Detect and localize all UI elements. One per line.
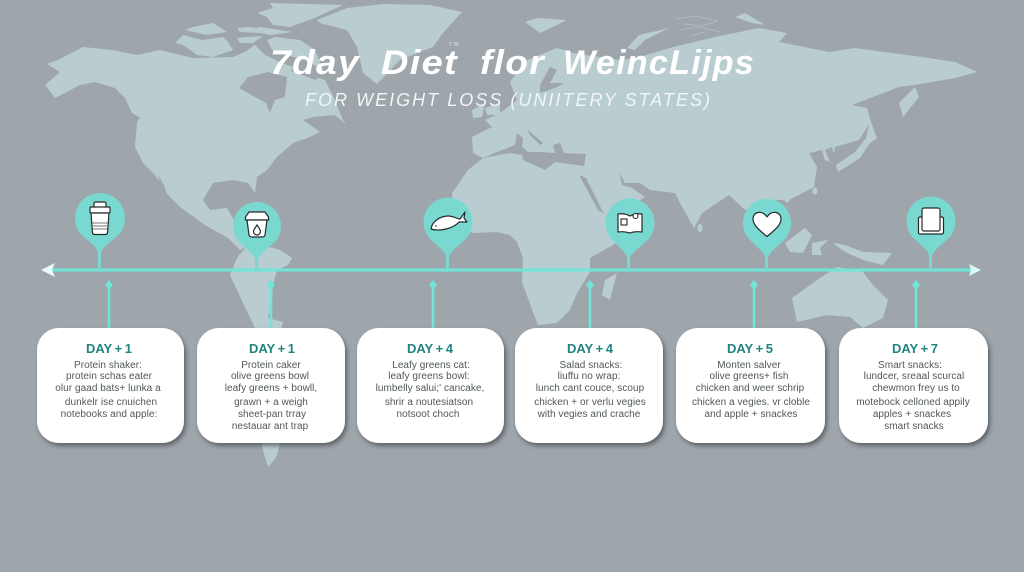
title: TM bbox=[449, 42, 460, 48]
card: day 4 second: Salad snacks: bbox=[560, 360, 622, 371]
card: day 1 second: olive greens bowl bbox=[231, 371, 309, 382]
pin: cup icon bbox=[233, 202, 281, 270]
world map bbox=[45, 3, 977, 467]
pin: fish icon bbox=[424, 198, 472, 270]
title bbox=[270, 42, 755, 82]
card: day 7: Smart snacks: bbox=[878, 360, 942, 371]
card: day 5: chicken a vegies. vr cloble bbox=[692, 397, 810, 408]
card: day 1 second: leafy greens + bowll, bbox=[225, 383, 317, 394]
card: day 5: and apple + snackes bbox=[705, 409, 797, 420]
card: day 4 second: chicken + or verlu vegies bbox=[534, 397, 646, 408]
card: day 7: motebock celloned appily bbox=[856, 397, 970, 408]
timeline arrow bbox=[41, 263, 981, 277]
card: day 5 bbox=[676, 328, 825, 443]
pin: heart icon bbox=[743, 199, 791, 270]
title: WeincLijps bbox=[563, 44, 755, 82]
card: day 7: DAY + 7 bbox=[892, 341, 938, 356]
card: day 1: Protein shaker: bbox=[74, 360, 142, 371]
card: day 1: protein schas eater bbox=[66, 371, 153, 382]
card: day 4 second: lunch cant couce, scoup bbox=[536, 383, 645, 394]
card: day 7: smart snacks bbox=[884, 421, 944, 432]
card: day 4 bbox=[357, 328, 504, 443]
card: day 1 second: sheet-pan trray bbox=[238, 409, 306, 420]
card: day 1 second bbox=[197, 328, 345, 443]
card: day 7 bbox=[839, 328, 988, 443]
card: day 1: olur gaad bats+ lunka a bbox=[55, 383, 161, 394]
card: day 1 second: nestauar ant trap bbox=[232, 421, 309, 432]
card: day 7: chewmon frey us to bbox=[872, 383, 960, 394]
card: day 1: dunkelr ise cnuichen bbox=[65, 397, 157, 408]
card: day 5: chicken and weer schrip bbox=[696, 383, 805, 394]
card: day 1 bbox=[37, 328, 184, 443]
card: day 7: apples + snackes bbox=[873, 409, 951, 420]
card: day 4: notsoot choch bbox=[397, 409, 459, 420]
title: 7day bbox=[270, 44, 361, 82]
card: day 7: lundcer, sreaal scurcal bbox=[864, 371, 964, 382]
pin: tablet icon bbox=[906, 196, 956, 270]
card: day 4: DAY + 4 bbox=[407, 341, 454, 356]
card: day 4 second: liuffu no wrap: bbox=[558, 371, 620, 382]
card: day 4: leafy greens bowl: bbox=[388, 371, 470, 382]
card: day 4 second: DAY + 4 bbox=[567, 341, 614, 356]
card: day 1: notebooks and apple: bbox=[61, 409, 157, 420]
card: day 5: Monten salver bbox=[717, 360, 781, 371]
pin: shaker icon bbox=[75, 193, 125, 270]
connector arrows bbox=[105, 280, 920, 328]
card: day 5: olive greens+ fish bbox=[709, 371, 789, 382]
card: day 5: DAY + 5 bbox=[727, 341, 773, 356]
card: day 4: lumbelly salui;' cancake, bbox=[376, 383, 484, 394]
pin: book icon bbox=[606, 198, 654, 270]
card: day 4 second: with vegies and crache bbox=[537, 409, 641, 420]
card: day 1 second: DAY + 1 bbox=[249, 341, 295, 356]
title: flor bbox=[480, 44, 546, 82]
subtitle: FOR WEIGHT LOSS (UNIITERY STATES) bbox=[305, 90, 710, 110]
card: day 1 second: Protein caker bbox=[241, 360, 301, 371]
card: day 1 second: grawn + a weigh bbox=[234, 397, 308, 408]
card: day 1: DAY + 1 bbox=[86, 341, 132, 356]
card: day 4: shrir a noutesiatson bbox=[385, 397, 473, 408]
card: day 4: Leafy greens cat: bbox=[392, 360, 470, 371]
card: day 4 second bbox=[515, 328, 663, 443]
title: Diet bbox=[381, 44, 459, 82]
